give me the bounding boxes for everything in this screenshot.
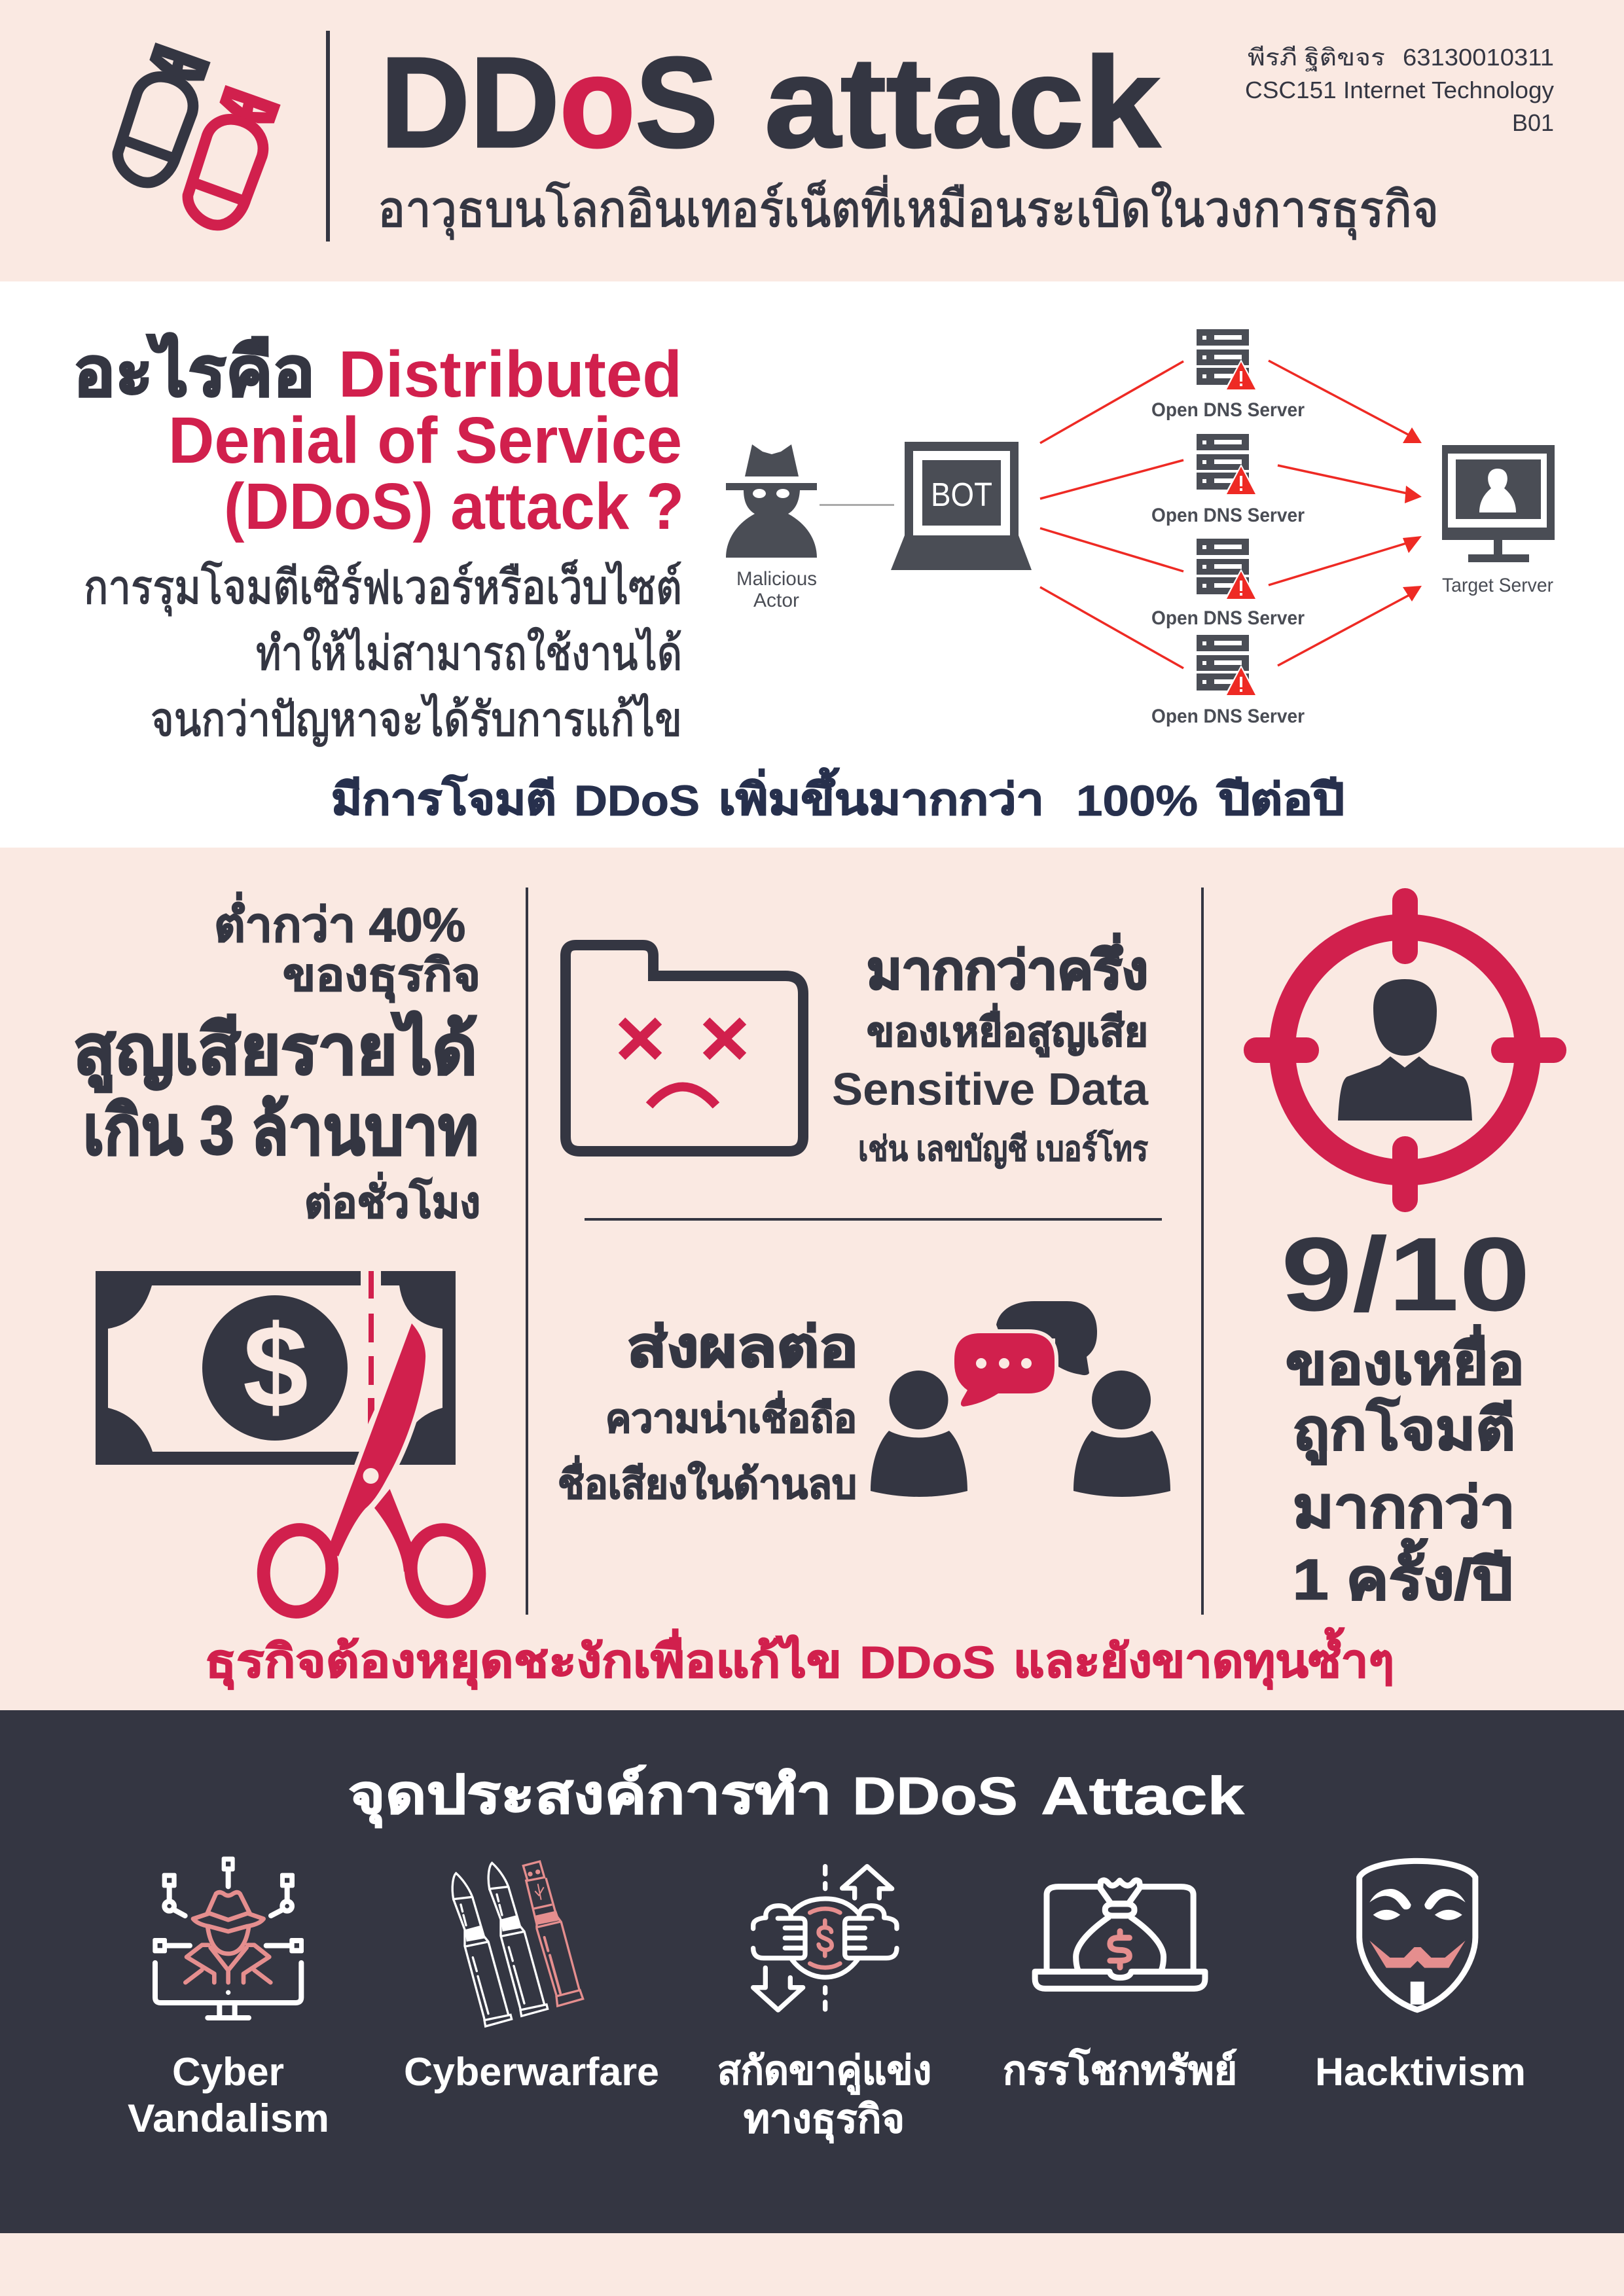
label: hacktivism: Hacktivism xyxy=(1315,2050,1526,2094)
icon: banknote and scissors: $ xyxy=(243,1301,308,1433)
title: DDoS xyxy=(380,31,718,174)
heading: what is DDoS: อะไรคือ xyxy=(73,333,315,410)
heading: what is DDoS xyxy=(73,333,684,543)
icon: hacktivism mask xyxy=(1360,1861,1475,2010)
text: reputation: ส่งผลต่อ xyxy=(627,1316,858,1378)
title xyxy=(380,31,1161,174)
label: malicious actor: Malicious xyxy=(736,568,817,590)
callout: business disruption: ธุรกิจต้องหยุดชะงักเพื่อแก้ไข xyxy=(205,1628,842,1690)
text: sensitive data xyxy=(832,933,1149,1169)
panel: business impact xyxy=(0,848,1624,1710)
label: malicious actor: Actor xyxy=(753,590,799,611)
subtitle: อาวุธบนโลกอินเทอร์เน็ตที่เหมือนระเบิดในวงการธุรกิจ xyxy=(378,175,1439,240)
text: reputation xyxy=(558,1316,858,1507)
icon: DNS server 2 xyxy=(1197,434,1258,495)
icon: DNS server 4 xyxy=(1197,635,1258,696)
panel: what is DDoS xyxy=(0,281,1624,848)
heading: motives: DDoS xyxy=(852,1767,1018,1826)
label: extortion: กรรโชกทรัพย์ xyxy=(1003,2047,1237,2092)
author block: CSC151 Internet Technology xyxy=(1245,77,1554,103)
icon: malicious actor xyxy=(726,444,817,558)
definition text xyxy=(84,560,682,746)
statistic: 9 of 10: 9/10 xyxy=(1281,1215,1530,1333)
text: sensitive data: เช่น เลขบัญชี เบอร์โทร xyxy=(858,1128,1148,1169)
diagram: DDoS attack flow xyxy=(726,329,1555,727)
labels: DNS servers: Open DNS Server xyxy=(1151,399,1305,421)
text: revenue loss: ของธุรกิจ xyxy=(283,950,480,1003)
label: competitive sabotage xyxy=(717,2049,931,2144)
label: cyber vandalism xyxy=(128,2050,329,2140)
labels: DNS servers: Open DNS Server xyxy=(1151,706,1305,727)
text: sensitive data: Sensitive Data xyxy=(832,1064,1149,1115)
statistic: 9 of 10: ถูกโจมตี xyxy=(1293,1397,1515,1465)
heading: what is DDoS: (DDoS) attack ? xyxy=(224,470,684,543)
icon: extortion laptop and money bag xyxy=(1035,1880,1205,1988)
label: competitive sabotage: สกัดขาคู่แข่ง xyxy=(717,2049,931,2095)
text: revenue loss: เกิน 3 ล้านบาท xyxy=(83,1093,478,1169)
labels: DNS servers: Open DNS Server xyxy=(1151,607,1305,629)
label: cyber vandalism: Cyber xyxy=(172,2050,284,2094)
icon: bot laptop: BOT xyxy=(931,476,992,513)
callout: business disruption: DDoS xyxy=(859,1637,996,1688)
statistic: 9 of 10: ของเหยื่อ xyxy=(1286,1324,1525,1396)
statistic: attacks growing: ปีต่อปี xyxy=(1216,775,1344,823)
label: target server: Target Server xyxy=(1442,575,1553,596)
statistic: attacks growing: 100% xyxy=(1076,776,1198,825)
text: revenue loss: สูญเสียรายได้ xyxy=(73,1011,477,1092)
author block: 63130010311 xyxy=(1403,44,1554,71)
text: revenue loss: ต่อชั่วโมง xyxy=(304,1172,480,1227)
icon: cyberwarfare bullets xyxy=(452,1861,583,2026)
panel: attack motives xyxy=(0,1710,1624,2233)
arrows: DNS servers to target xyxy=(1269,361,1422,666)
text: revenue loss: ต่ำกว่า 40% xyxy=(214,891,465,952)
text: sensitive data: มากกว่าครึ่ง xyxy=(867,933,1148,999)
icon: target server xyxy=(1442,445,1555,562)
heading: what is DDoS: Distributed xyxy=(338,338,682,411)
statistic: 9 of 10 xyxy=(1281,1215,1530,1611)
text: sensitive data: ของเหยื่อสูญเสีย xyxy=(867,1003,1148,1057)
callout: business disruption: และยังขาดทุนซ้ำๆ xyxy=(1013,1627,1394,1690)
labels: DNS servers xyxy=(1151,399,1305,727)
text: revenue loss xyxy=(73,891,480,1227)
statistic: attacks growing: DDoS xyxy=(574,776,700,825)
author block xyxy=(1245,44,1554,136)
statistic: attacks growing: มีการโจมตี xyxy=(331,774,556,823)
icon: bombs xyxy=(118,43,281,225)
icon: DNS server 1 xyxy=(1197,329,1258,391)
heading: what is DDoS: Denial of Service xyxy=(168,404,682,477)
icon: target crosshair xyxy=(1244,888,1566,1212)
label: cyber vandalism: Vandalism xyxy=(128,2096,329,2140)
icon: people talking xyxy=(871,1301,1170,1497)
label: competitive sabotage: ทางธุรกิจ xyxy=(744,2097,905,2144)
label: malicious actor xyxy=(736,568,817,611)
icon: competitive sabotage xyxy=(753,1867,897,2010)
arrows: bot to DNS servers xyxy=(1040,361,1183,668)
icon: DNS server 3 xyxy=(1197,539,1258,600)
label: cyberwarfare: Cyberwarfare xyxy=(404,2050,659,2094)
definition text: จนกว่าปัญหาจะได้รับการแก้ไข xyxy=(151,693,682,746)
statistic: 9 of 10: 1 ครั้ง/ปี xyxy=(1293,1538,1513,1611)
definition text: ทำให้ไม่สามารถใช้งานได้ xyxy=(256,627,682,680)
panel: header xyxy=(0,0,1624,281)
heading: motives: Attack xyxy=(1041,1767,1244,1826)
statistic: attacks growing xyxy=(331,767,1344,825)
text: reputation: ชื่อเสียงในด้านลบ xyxy=(558,1456,857,1507)
definition text: การรุมโจมตีเซิร์ฟเวอร์หรือเว็บไซต์ xyxy=(84,560,682,616)
heading: motives xyxy=(348,1765,1244,1828)
icon: cyber vandalism xyxy=(153,1857,304,2018)
statistic: 9 of 10: มากกว่า xyxy=(1293,1477,1515,1539)
heading: motives: จุดประสงค์การทำ xyxy=(348,1765,832,1828)
callout: business disruption xyxy=(205,1627,1394,1690)
statistic: attacks growing: เพิ่มขึ้นมากกว่า xyxy=(719,767,1044,823)
icon: banknote and scissors xyxy=(96,1271,486,1617)
author block: B01 xyxy=(1512,109,1554,136)
title: attack xyxy=(765,31,1161,174)
icon: sad folder xyxy=(566,945,803,1151)
labels: DNS servers: Open DNS Server xyxy=(1151,505,1305,526)
text: reputation: ความน่าเชื่อถือ xyxy=(605,1391,857,1441)
icon: bot laptop xyxy=(891,442,1032,570)
author block: พีรภี ฐิติขจร xyxy=(1248,44,1385,72)
